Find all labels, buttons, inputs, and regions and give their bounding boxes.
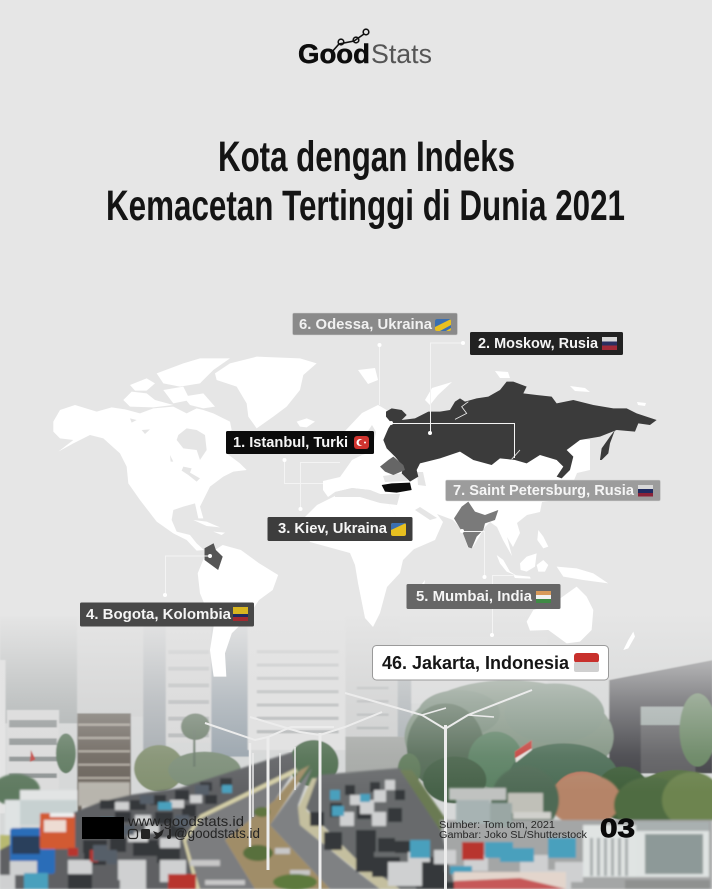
- Eurasia: [323, 405, 590, 556]
- flag in the photo: [30, 740, 532, 763]
- label: 3. Kiev: 3. Kiev, Ukraina: [278, 521, 388, 537]
- road surfaces: [0, 752, 712, 889]
- fog fading into the background: [0, 612, 712, 792]
- label: 2. Moskow: [470, 332, 623, 355]
- photo: road and traffic: [0, 752, 712, 889]
- Australia and Southeast Asia islands: [497, 530, 635, 650]
- footer: website and social handles: @goodstats.id: [174, 825, 260, 841]
- shelters and station: [449, 788, 710, 889]
- country: Turkey: [382, 483, 412, 493]
- flag: Indonesia: [574, 653, 599, 672]
- footer: website and social handles: www.goodstats.id: [127, 813, 244, 829]
- flag: Turkey: [354, 436, 369, 449]
- Gulf of Ob and Lake Baikal: [455, 402, 520, 459]
- Africa: [300, 495, 420, 627]
- label: 1. Istanbul: 1. Istanbul, Turki: [233, 435, 348, 451]
- trees behind the right-hand shelters: [491, 766, 712, 834]
- label: 7. Saint Petersburg: [446, 480, 660, 501]
- label: 46. Jakarta: 46. Jakarta, Indonesia: [382, 652, 570, 673]
- social icons: [128, 829, 171, 839]
- photo: Jakarta skyline and trees: [0, 613, 712, 889]
- label: 3. Kiev: [268, 517, 412, 541]
- logo wordmark: Stats: [371, 39, 432, 69]
- logo: [298, 29, 432, 69]
- country: Russia: [380, 382, 657, 493]
- label: 7. Saint Petersburg: 7. Saint Petersburg, Rusia: [453, 483, 635, 499]
- flag: Russia: [602, 337, 617, 350]
- footer: sources: Sumber: Tom tom, 2021: [439, 819, 555, 831]
- left building base and shelter: [0, 774, 130, 853]
- title: Kota dengan Indeks: [218, 133, 515, 181]
- footer: sources: Gambar: Joko SL/Shutterstock: [439, 829, 588, 841]
- country: Colombia: [205, 543, 223, 570]
- label: 4. Bogota: 4. Bogota, Kolombia: [86, 607, 232, 623]
- seas over land: [335, 425, 437, 520]
- street lamps: [205, 690, 532, 889]
- world map: [53, 357, 657, 677]
- logo wordmark: Good: [298, 39, 370, 69]
- logo wordmark: [298, 39, 432, 69]
- footer: website and social handles: [127, 813, 260, 841]
- Greenland: [215, 357, 317, 428]
- label: 5. Mumbai: 5. Mumbai, India: [416, 589, 533, 605]
- city buildings: [0, 617, 712, 815]
- South America: [198, 545, 278, 677]
- label: 2. Moskow: 2. Moskow, Rusia: [478, 336, 599, 352]
- country: India: [454, 502, 498, 548]
- label: 46. Jakarta: [372, 646, 608, 680]
- label: 5. Mumbai: [406, 584, 560, 609]
- country: Ukraine: [380, 457, 405, 475]
- Iceland: [297, 418, 315, 427]
- label: 1. Istanbul: [226, 431, 374, 454]
- page number: 03: [600, 813, 635, 843]
- North American lakes: [130, 418, 207, 482]
- label: 6. Odessa: 6. Odessa, Ukraina: [299, 317, 433, 333]
- footer: sources: [439, 819, 588, 841]
- label: 4. Bogota: [80, 602, 254, 626]
- footer: redacted block: [82, 817, 124, 839]
- logo: rising line icon: [331, 29, 369, 53]
- flag: Ukraine: [435, 319, 451, 331]
- flag: Ukraine: [391, 523, 406, 536]
- label: 6. Odessa: [292, 313, 458, 335]
- flag: Russia: [638, 485, 653, 496]
- Sakhalin and Kamchatka: [600, 430, 615, 460]
- connector dots: [163, 341, 494, 637]
- title: [106, 133, 625, 230]
- flag: Colombia: [233, 607, 248, 621]
- North America and Arctic islands: [53, 357, 317, 551]
- Arctic islands of Eurasia: [358, 368, 646, 608]
- connector lines: [166, 343, 514, 635]
- Caribbean islands: [193, 520, 225, 535]
- trees: [0, 680, 712, 823]
- flag: India: [536, 591, 551, 603]
- traffic: [0, 778, 583, 889]
